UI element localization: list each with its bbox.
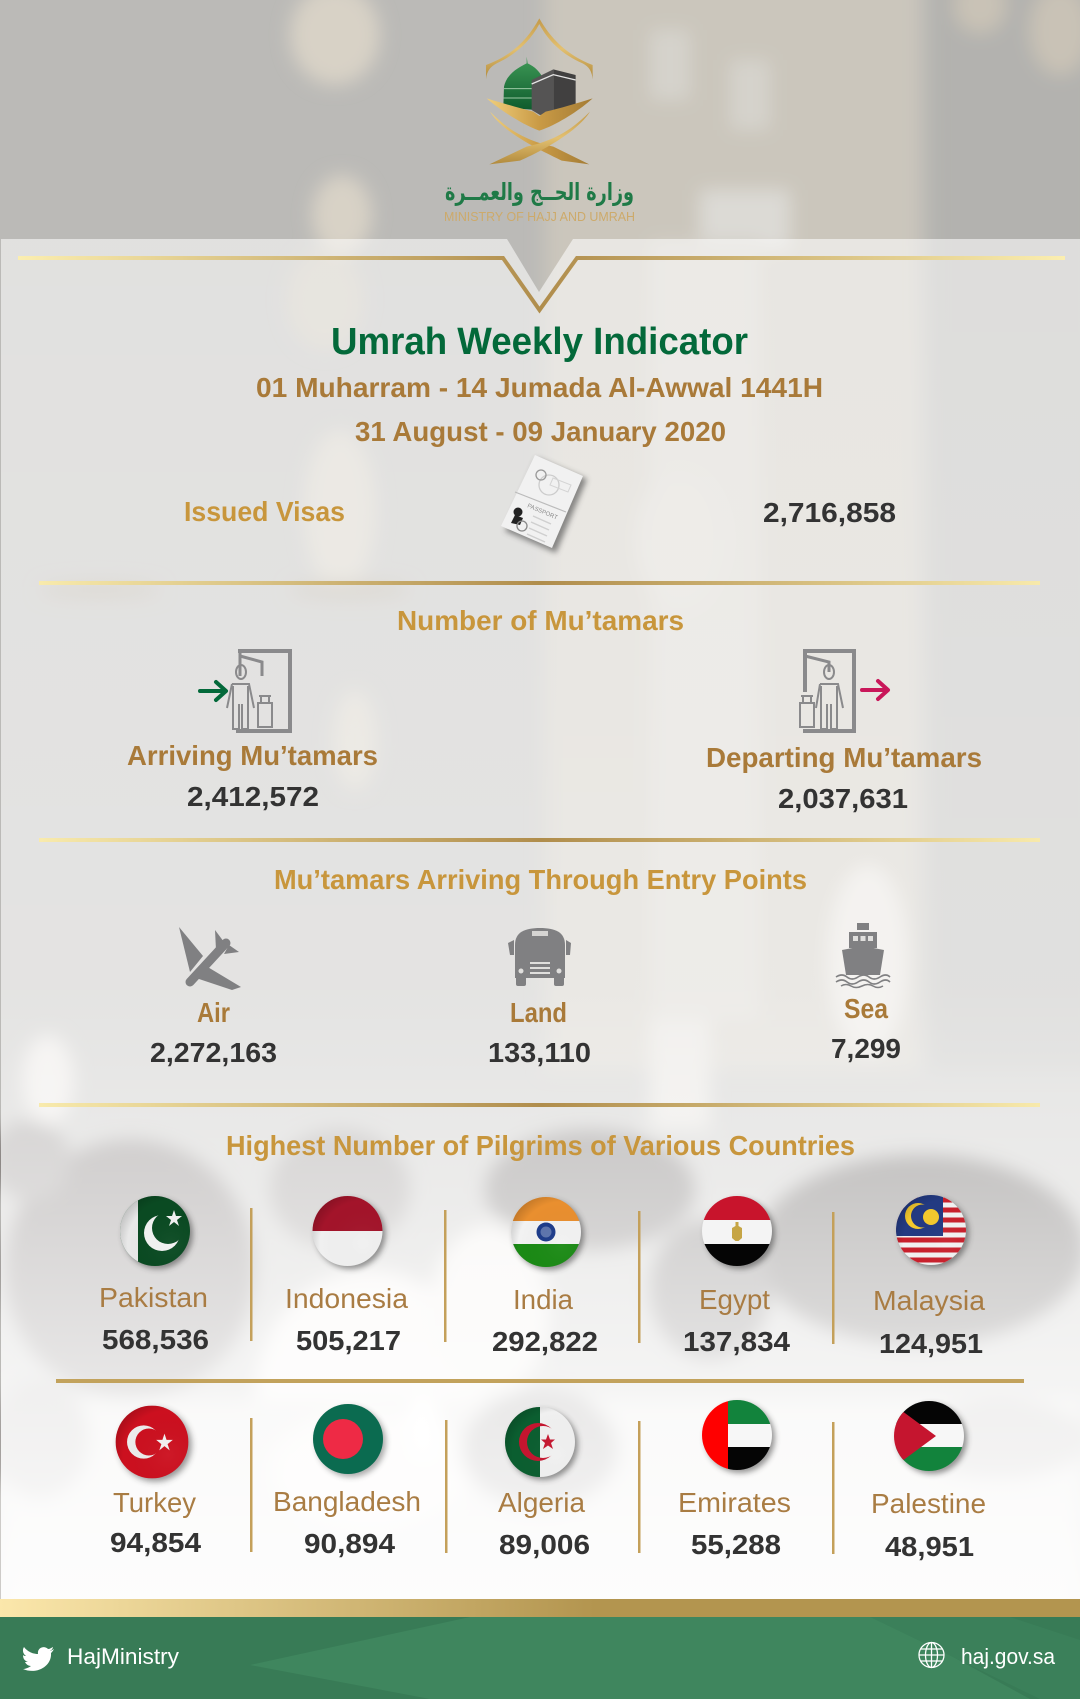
number: Bangladesh: 90,894 bbox=[304, 1528, 395, 1559]
issued visas number: 2,716,858 bbox=[763, 497, 896, 528]
flag: Palestine bbox=[894, 1401, 967, 1474]
divider bbox=[445, 1420, 448, 1553]
flag: India bbox=[511, 1197, 584, 1270]
icon: bus bbox=[508, 928, 571, 986]
land entry bbox=[488, 928, 591, 1068]
twitter handle: HajMinistry bbox=[67, 1644, 179, 1669]
country: Indonesia bbox=[285, 1196, 408, 1356]
logo English name: MINISTRY OF HAJJ AND UMRAH bbox=[444, 210, 635, 224]
land label: Land bbox=[510, 997, 567, 1028]
ministry logo bbox=[444, 18, 635, 224]
number: Turkey: 94,854 bbox=[110, 1527, 201, 1558]
departing label: Departing Mu’tamars bbox=[706, 742, 982, 773]
gregorian date range: 31 August - 09 January 2020 bbox=[355, 416, 726, 447]
icon: twitter bbox=[23, 1647, 54, 1671]
label: Indonesia: Indonesia bbox=[285, 1283, 408, 1314]
divider bbox=[250, 1208, 252, 1341]
top gold chevron line bbox=[18, 258, 1065, 310]
air label: Air bbox=[197, 997, 230, 1028]
country: Palestine bbox=[871, 1401, 986, 1562]
section heading: entry points: Mu’tamars Arriving Through Entry Points bbox=[274, 864, 807, 895]
flag: Bangladesh bbox=[313, 1404, 386, 1477]
label: Turkey: Turkey bbox=[113, 1487, 196, 1518]
divider bbox=[638, 1421, 640, 1553]
flag: Pakistan bbox=[120, 1196, 193, 1269]
sea entry bbox=[831, 923, 901, 1064]
title: Umrah Weekly Indicator bbox=[331, 321, 748, 363]
number: Egypt: 137,834 bbox=[683, 1326, 790, 1357]
flag: Indonesia bbox=[312, 1196, 386, 1269]
icon: ship bbox=[836, 923, 890, 988]
number: Indonesia: 505,217 bbox=[296, 1325, 401, 1356]
sea label: Sea bbox=[844, 993, 888, 1024]
divider bbox=[444, 1210, 446, 1342]
website: haj.gov.sa bbox=[961, 1644, 1056, 1669]
label: Palestine: Palestine bbox=[871, 1488, 986, 1519]
air entry bbox=[150, 927, 277, 1068]
divider bbox=[832, 1422, 834, 1554]
flag: Turkey bbox=[116, 1406, 192, 1482]
divider bbox=[250, 1418, 252, 1552]
country: Algeria bbox=[498, 1407, 590, 1560]
footer gold bar bbox=[0, 1599, 1080, 1617]
issued visas row bbox=[184, 455, 896, 553]
label: Egypt: Egypt bbox=[699, 1284, 770, 1315]
flag: Emirates bbox=[702, 1400, 775, 1473]
icon: globe bbox=[919, 1642, 944, 1668]
number: Palestine: 48,951 bbox=[885, 1531, 974, 1562]
label: Algeria: Algeria bbox=[498, 1487, 585, 1518]
country: Emirates bbox=[678, 1400, 791, 1560]
country: Egypt bbox=[683, 1196, 790, 1357]
number: Pakistan: 568,536 bbox=[102, 1324, 209, 1355]
label: Emirates: Emirates bbox=[678, 1487, 791, 1518]
icon: arriving person bbox=[200, 651, 290, 731]
logo Arabic name: وزارة الحــج والعمــرة bbox=[445, 178, 634, 206]
arriving label: Arriving Mu’tamars bbox=[127, 740, 378, 771]
country: Turkey bbox=[110, 1406, 201, 1558]
country: Bangladesh bbox=[273, 1404, 421, 1559]
arrow: red bbox=[862, 681, 888, 699]
country: Pakistan bbox=[99, 1196, 209, 1355]
departing mutamars bbox=[706, 651, 982, 814]
issued visas label: Issued Visas bbox=[184, 496, 345, 527]
divider bbox=[832, 1212, 834, 1344]
flag: Malaysia bbox=[896, 1195, 969, 1268]
arrow: green bbox=[200, 682, 226, 700]
hijri date range: 01 Muharram - 14 Jumada Al-Awwal 1441H bbox=[256, 372, 823, 403]
country: Malaysia bbox=[873, 1195, 985, 1359]
flag: Egypt bbox=[702, 1196, 775, 1269]
number: India: 292,822 bbox=[492, 1326, 598, 1357]
divider bbox=[638, 1211, 640, 1343]
number: Malaysia: 124,951 bbox=[879, 1328, 983, 1359]
country: India bbox=[492, 1197, 598, 1357]
footer bbox=[0, 1617, 1080, 1699]
label: Malaysia: Malaysia bbox=[873, 1285, 985, 1316]
number: Emirates: 55,288 bbox=[691, 1529, 781, 1560]
icon: passport bbox=[501, 455, 587, 553]
label: Bangladesh: Bangladesh bbox=[273, 1486, 421, 1517]
section heading: countries: Highest Number of Pilgrims of Various Countries bbox=[226, 1130, 855, 1161]
departing number: 2,037,631 bbox=[778, 783, 908, 814]
air number: 2,272,163 bbox=[150, 1037, 277, 1068]
section heading: number of mutamars: Number of Mu’tamars bbox=[397, 605, 684, 636]
label: India: India bbox=[513, 1284, 573, 1315]
label: Pakistan: Pakistan bbox=[99, 1282, 208, 1313]
arriving number: 2,412,572 bbox=[187, 781, 319, 812]
land number: 133,110 bbox=[488, 1037, 591, 1068]
arriving mutamars bbox=[127, 651, 378, 812]
flag: Algeria bbox=[505, 1407, 578, 1480]
icon: departing person bbox=[800, 651, 888, 731]
number: Algeria: 89,006 bbox=[499, 1529, 590, 1560]
icon: passport: PASSPORT bbox=[526, 503, 558, 522]
sea number: 7,299 bbox=[831, 1033, 901, 1064]
icon: plane bbox=[179, 927, 241, 990]
